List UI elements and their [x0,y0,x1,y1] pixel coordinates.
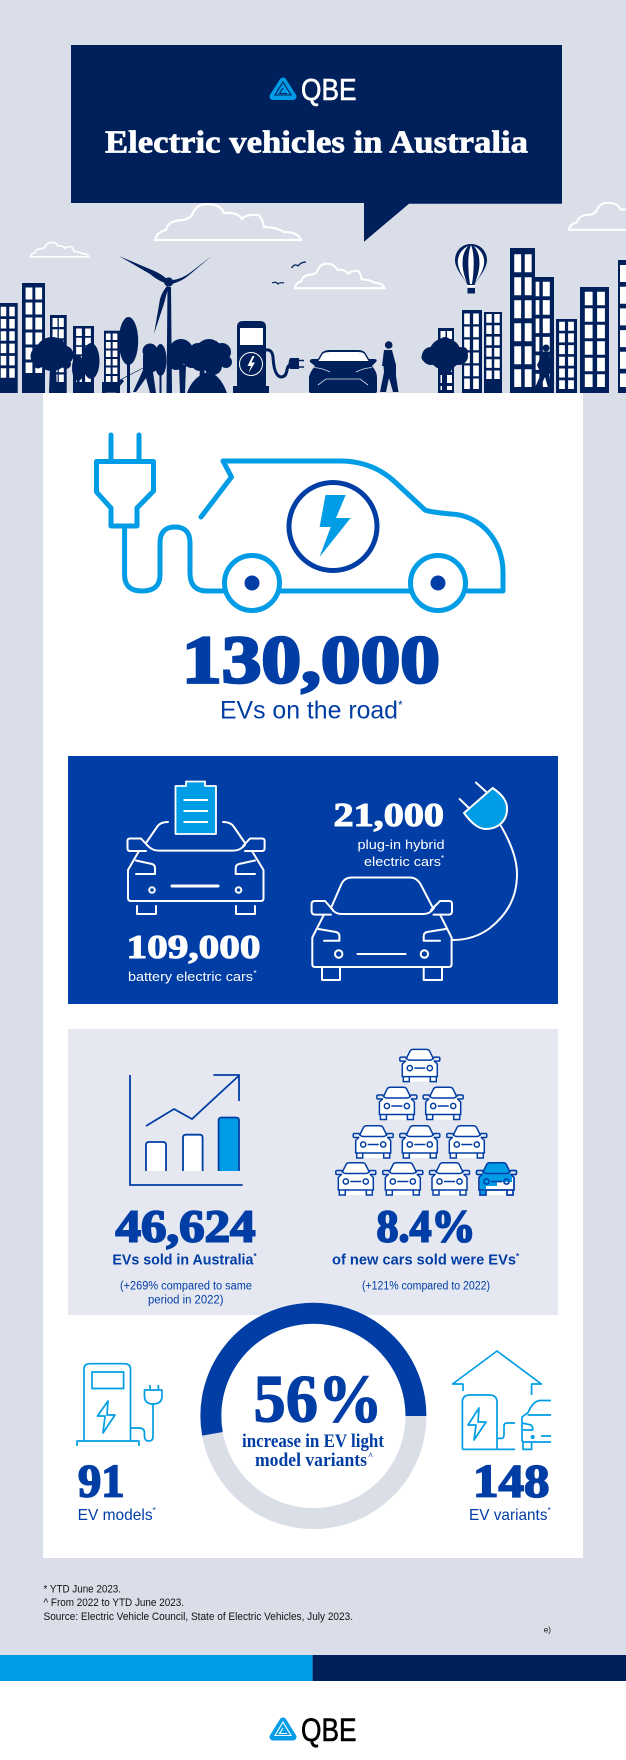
birds [272,262,306,284]
skyline: right buildings [438,248,626,393]
footer QBE logo [273,1712,356,1748]
footer QBE logo: QBE [301,1712,356,1748]
icon: plug-in hybrid car with cable [312,783,517,980]
icon: battery [176,782,216,834]
stat: 91 EV models: EV models [78,1507,153,1524]
text: battery electric cars: * [254,969,257,978]
text: EVs sold in Australia: EVs sold in Australia [112,1252,254,1268]
QBE logo: QBE [301,72,356,107]
stat: 91 EV models: 91 [78,1456,124,1508]
stat: 148 EV variants [469,1456,552,1524]
stat: 21,000: 21,000 [334,797,444,834]
stat: 91 EV models: * [152,1505,156,1515]
icon: battery electric car [128,822,265,914]
text: compared to same period [120,1281,252,1307]
text: compared to same period: (+269% compared to same [120,1281,252,1293]
skyline: wind turbine [119,256,212,393]
cloud: middle [295,264,384,288]
icon: charging station [77,1364,162,1446]
stat: 130,000 EVs on the road: 130,000 [182,622,440,698]
footer stripe [0,1655,626,1681]
stat: 130,000 EVs on the road: * [398,698,403,712]
stat: 46,624: 46,624 [116,1202,256,1252]
text: of new cars sold were EVs: * [516,1252,520,1261]
text: plug-in hybrid electric cars: electric cars [364,854,442,869]
footnotes [44,1583,551,1635]
main white panel [43,393,583,1558]
stat: 130,000 EVs on the road: EVs on the road [220,696,398,724]
text: plug-in hybrid electric cars: * [441,854,444,863]
skyline: charging station [233,321,304,393]
chart: 56% ring [211,1313,416,1518]
icon: car with plug [96,435,503,610]
cloud: large [155,204,301,240]
text: battery electric cars: battery electric cars [128,969,254,984]
skyline: hot air balloon [455,244,487,294]
text: compared to 2022: (+121% compared to 2022) [362,1281,490,1293]
footnotes: * YTD June 2023. [44,1583,121,1595]
icon: growth chart [130,1075,243,1185]
text: compared to same period: period in 2022) [148,1295,224,1307]
stat: 148 EV variants: 148 [473,1456,550,1508]
text: increase in EV light model variants: ^ [368,1451,373,1461]
text: increase in EV light model variants [242,1431,385,1471]
stat: 148 EV variants: * [548,1505,552,1515]
stat: 109,000: 109,000 [126,929,260,966]
footnotes: e) [544,1625,551,1635]
stat: 148 EV variants: EV variants [469,1507,548,1524]
text: increase in EV light model variants: increase in EV light [242,1431,385,1452]
icon: home charger and car [453,1351,551,1449]
cloud: right [569,203,626,230]
skyline: car [309,350,377,393]
icon: pyramid of cars [336,1049,516,1195]
text: plug-in hybrid electric cars: plug-in hybrid [358,837,444,852]
text: EVs sold in Australia: * [254,1252,258,1261]
text: increase in EV light model variants: model variants [255,1450,367,1471]
text: plug-in hybrid electric cars [358,837,444,869]
title speech bubble [71,45,562,242]
stat: 130,000 EVs on the road [182,622,440,724]
text: of new cars sold were EVs: of new cars sold were EVs [332,1252,516,1268]
skyline: walking person [380,341,398,392]
stat: 56%: 56% [254,1360,382,1436]
skyline: person walking a dog [102,344,158,393]
skyline: right tree [422,337,468,393]
cloud: left [30,242,89,257]
skyline: left trees [30,317,166,393]
panel: sales [68,1029,558,1315]
icon: wheel hubs and lightning bolt [244,495,446,590]
footnotes: ^ From 2022 to YTD June 2023. [44,1597,184,1609]
skyline: walking woman [533,344,552,392]
skyline: bushes [168,339,232,393]
footnotes: Source: Electric Vehicle Council, State of Electric Vehicles, July 2023. [44,1611,353,1623]
QBE logo [273,72,356,107]
panel: battery and plug-in hybrid cars [68,756,558,1004]
stat: 8.4%: 8.4% [376,1202,476,1252]
stat: 91 EV models [78,1456,156,1524]
skyline: left buildings [0,283,120,393]
title: Electric vehicles in Australia [105,124,528,160]
